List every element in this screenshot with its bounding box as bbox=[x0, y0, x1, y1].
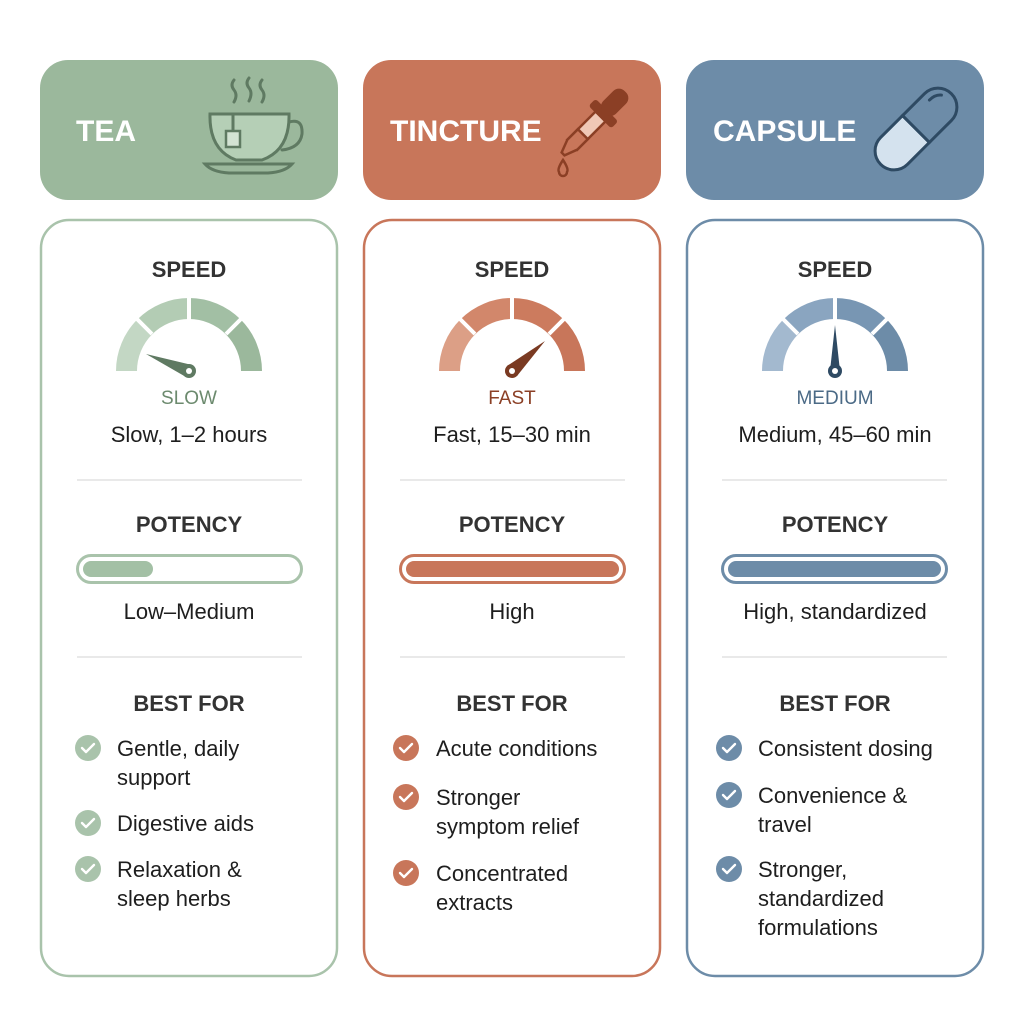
heading: potency: POTENCY bbox=[459, 512, 565, 537]
header title: tea: TEA bbox=[76, 115, 136, 148]
list: tea best for: Relaxation & bbox=[117, 857, 242, 882]
list: capsule best for: formulations bbox=[758, 915, 878, 940]
list: tea best for bbox=[75, 735, 254, 911]
icon: dropper bbox=[552, 80, 637, 165]
potency text: High, standardized bbox=[743, 599, 927, 624]
gauge label: SLOW bbox=[161, 388, 217, 409]
list: capsule best for bbox=[716, 735, 933, 940]
list: tea best for: support bbox=[117, 765, 190, 790]
header: tea bbox=[40, 60, 338, 200]
icon: capsule bbox=[867, 80, 965, 178]
speed text: Medium, 45–60 min bbox=[738, 422, 932, 447]
list: tea best for: Gentle, daily bbox=[117, 736, 239, 761]
list: tincture best for: symptom relief bbox=[436, 814, 580, 839]
list: capsule best for: Consistent dosing bbox=[758, 736, 933, 761]
gauge: slow bbox=[116, 296, 262, 378]
gauge label: MEDIUM bbox=[796, 388, 874, 409]
panel: capsule bbox=[687, 220, 983, 976]
heading: potency: POTENCY bbox=[782, 512, 888, 537]
potency text: Low–Medium bbox=[124, 599, 254, 624]
gauge: medium bbox=[762, 296, 908, 378]
speed text: Fast, 15–30 min bbox=[433, 422, 591, 447]
list: tincture best for: Stronger bbox=[436, 785, 520, 810]
heading: best for: BEST FOR bbox=[456, 691, 568, 716]
icon: teacup bbox=[205, 78, 302, 173]
header title: tincture: TINCTURE bbox=[390, 115, 542, 148]
list: capsule best for: Convenience & bbox=[758, 783, 908, 808]
list: tincture best for bbox=[393, 735, 597, 915]
heading: speed: SPEED bbox=[152, 257, 226, 282]
heading: speed: SPEED bbox=[475, 257, 549, 282]
list: tea best for: Digestive aids bbox=[117, 811, 254, 836]
header: capsule bbox=[686, 60, 984, 200]
list: capsule best for: standardized bbox=[758, 886, 884, 911]
panel: tea bbox=[41, 220, 337, 976]
list: capsule best for: Stronger, bbox=[758, 857, 847, 882]
gauge label: FAST bbox=[488, 388, 536, 409]
potency text: High bbox=[489, 599, 535, 624]
header title: capsule: CAPSULE bbox=[713, 115, 856, 148]
list: capsule best for: travel bbox=[758, 812, 812, 837]
header: tincture bbox=[363, 60, 661, 200]
heading: best for: BEST FOR bbox=[133, 691, 245, 716]
list: tincture best for: Concentrated bbox=[436, 861, 568, 886]
heading: speed: SPEED bbox=[798, 257, 872, 282]
gauge: fast bbox=[439, 296, 585, 378]
potency bar bbox=[78, 556, 302, 582]
potency bar bbox=[722, 556, 946, 582]
heading: best for: BEST FOR bbox=[779, 691, 891, 716]
panel: tincture bbox=[364, 220, 660, 976]
speed text: Slow, 1–2 hours bbox=[111, 422, 267, 447]
list: tincture best for: Acute conditions bbox=[436, 736, 597, 761]
potency bar bbox=[400, 556, 624, 582]
list: tea best for: sleep herbs bbox=[117, 886, 231, 911]
list: tincture best for: extracts bbox=[436, 890, 513, 915]
heading: potency: POTENCY bbox=[136, 512, 242, 537]
